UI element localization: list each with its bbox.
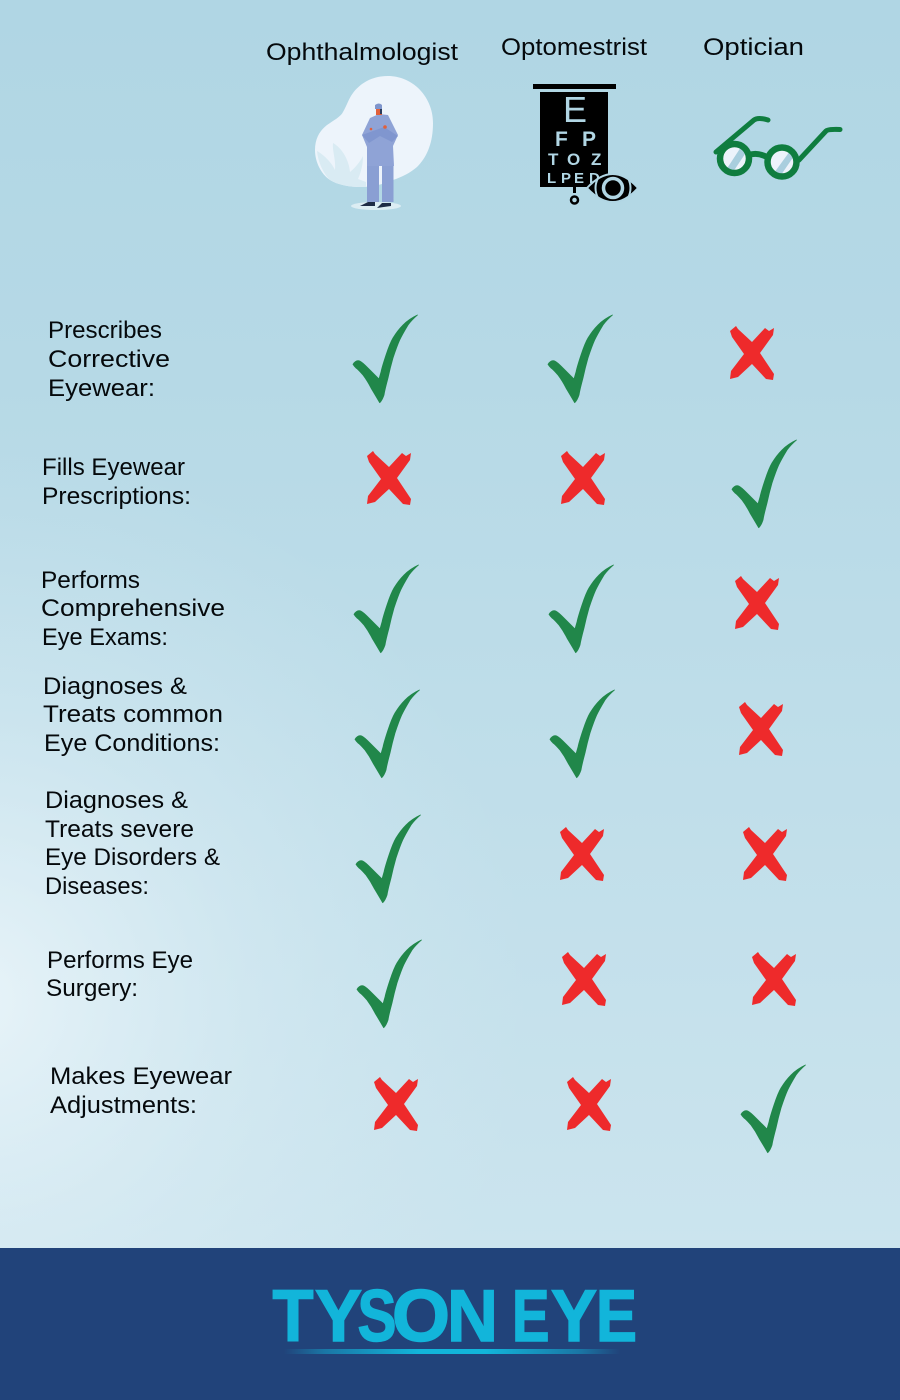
row marks: Makes Eyewear Adjustments xyxy=(374,1065,806,1153)
row label: Performs Eye Surgery: Surgery: xyxy=(46,975,138,1002)
row label: Diagnoses and Treats common Eye Conditions xyxy=(43,673,223,757)
row label: Makes Eyewear Adjustments: Adjustments: xyxy=(50,1092,197,1119)
icon: eye chart: E xyxy=(563,89,587,130)
row label: Diagnoses and Treats severe Eye Disorders and Diseases xyxy=(45,787,220,900)
row label: Performs Comprehensive Eye Exams xyxy=(41,567,225,651)
footer band xyxy=(0,1248,900,1400)
footer logo: Tyson Eye: N xyxy=(447,1276,498,1357)
row marks: Performs Eye Surgery xyxy=(357,940,796,1028)
row label: Prescribes Corrective Eyewear xyxy=(48,317,170,402)
row label: Diagnoses and Treats severe Eye Disorders and Diseases: Diseases: xyxy=(45,873,149,900)
row label: Diagnoses and Treats severe Eye Disorders and Diseases: Diagnoses & xyxy=(45,787,188,814)
row label: Diagnoses and Treats severe Eye Disorders and Diseases: Eye Disorders & xyxy=(45,844,220,871)
row marks: Prescribes Corrective Eyewear xyxy=(353,315,774,403)
icon: ophthalmologist figure xyxy=(315,76,433,210)
column heading: Optomestrist: Optomestrist xyxy=(501,34,647,61)
row label: Diagnoses and Treats common Eye Conditions: Treats common xyxy=(43,701,223,728)
footer logo: Tyson Eye: Y xyxy=(315,1276,362,1357)
row label: Diagnoses and Treats common Eye Conditions: Eye Conditions: xyxy=(44,730,220,757)
row label: Performs Eye Surgery: Performs Eye xyxy=(47,947,193,974)
icon: eye chart: TOZ xyxy=(548,150,601,169)
row label: Performs Comprehensive Eye Exams: Eye Exams: xyxy=(42,624,168,651)
row label: Performs Eye Surgery xyxy=(46,947,193,1002)
footer logo: Tyson Eye xyxy=(272,1276,637,1357)
icon: eye chart: LPED xyxy=(547,170,600,187)
row marks: Fills Eyewear Prescriptions xyxy=(367,440,796,528)
row label: Makes Eyewear Adjustments: Makes Eyewear xyxy=(50,1063,232,1090)
row marks: Diagnoses and Treats common Eye Conditions xyxy=(355,690,783,778)
footer logo: Tyson Eye: Y xyxy=(551,1276,597,1357)
footer logo: Tyson Eye: E xyxy=(512,1276,550,1357)
icon: green glasses xyxy=(716,118,840,176)
icon: eye chart: FP xyxy=(555,128,596,151)
icon: eye chart xyxy=(533,84,638,204)
row label: Fills Eyewear Prescriptions xyxy=(42,454,191,510)
footer logo: Tyson Eye: S xyxy=(358,1276,396,1357)
row label: Diagnoses and Treats severe Eye Disorders and Diseases: Treats severe xyxy=(45,816,194,843)
row label: Prescribes Corrective Eyewear: Corrective xyxy=(48,346,170,373)
footer logo: Tyson Eye: T xyxy=(272,1276,314,1357)
row label: Fills Eyewear Prescriptions: Fills Eyewear xyxy=(42,454,185,481)
row marks: Performs Comprehensive Eye Exams xyxy=(354,565,779,653)
row label: Performs Comprehensive Eye Exams: Performs xyxy=(41,567,140,594)
column heading: Optician: Optician xyxy=(703,34,804,61)
row label: Diagnoses and Treats common Eye Conditions: Diagnoses & xyxy=(43,673,187,700)
footer logo: Tyson Eye: E xyxy=(596,1276,637,1357)
column heading: Ophthalmologist: Ophthalmologist xyxy=(266,39,458,66)
row marks: Diagnoses and Treats severe Eye Disorders xyxy=(356,815,787,903)
row label: Prescribes Corrective Eyewear: Prescribes xyxy=(48,317,162,344)
row label: Prescribes Corrective Eyewear: Eyewear: xyxy=(48,375,155,402)
row label: Performs Comprehensive Eye Exams: Comprehensive xyxy=(41,595,225,622)
row label: Makes Eyewear Adjustments xyxy=(50,1063,232,1119)
row label: Fills Eyewear Prescriptions: Prescriptions: xyxy=(42,483,191,510)
footer logo: Tyson Eye: O xyxy=(392,1276,450,1357)
